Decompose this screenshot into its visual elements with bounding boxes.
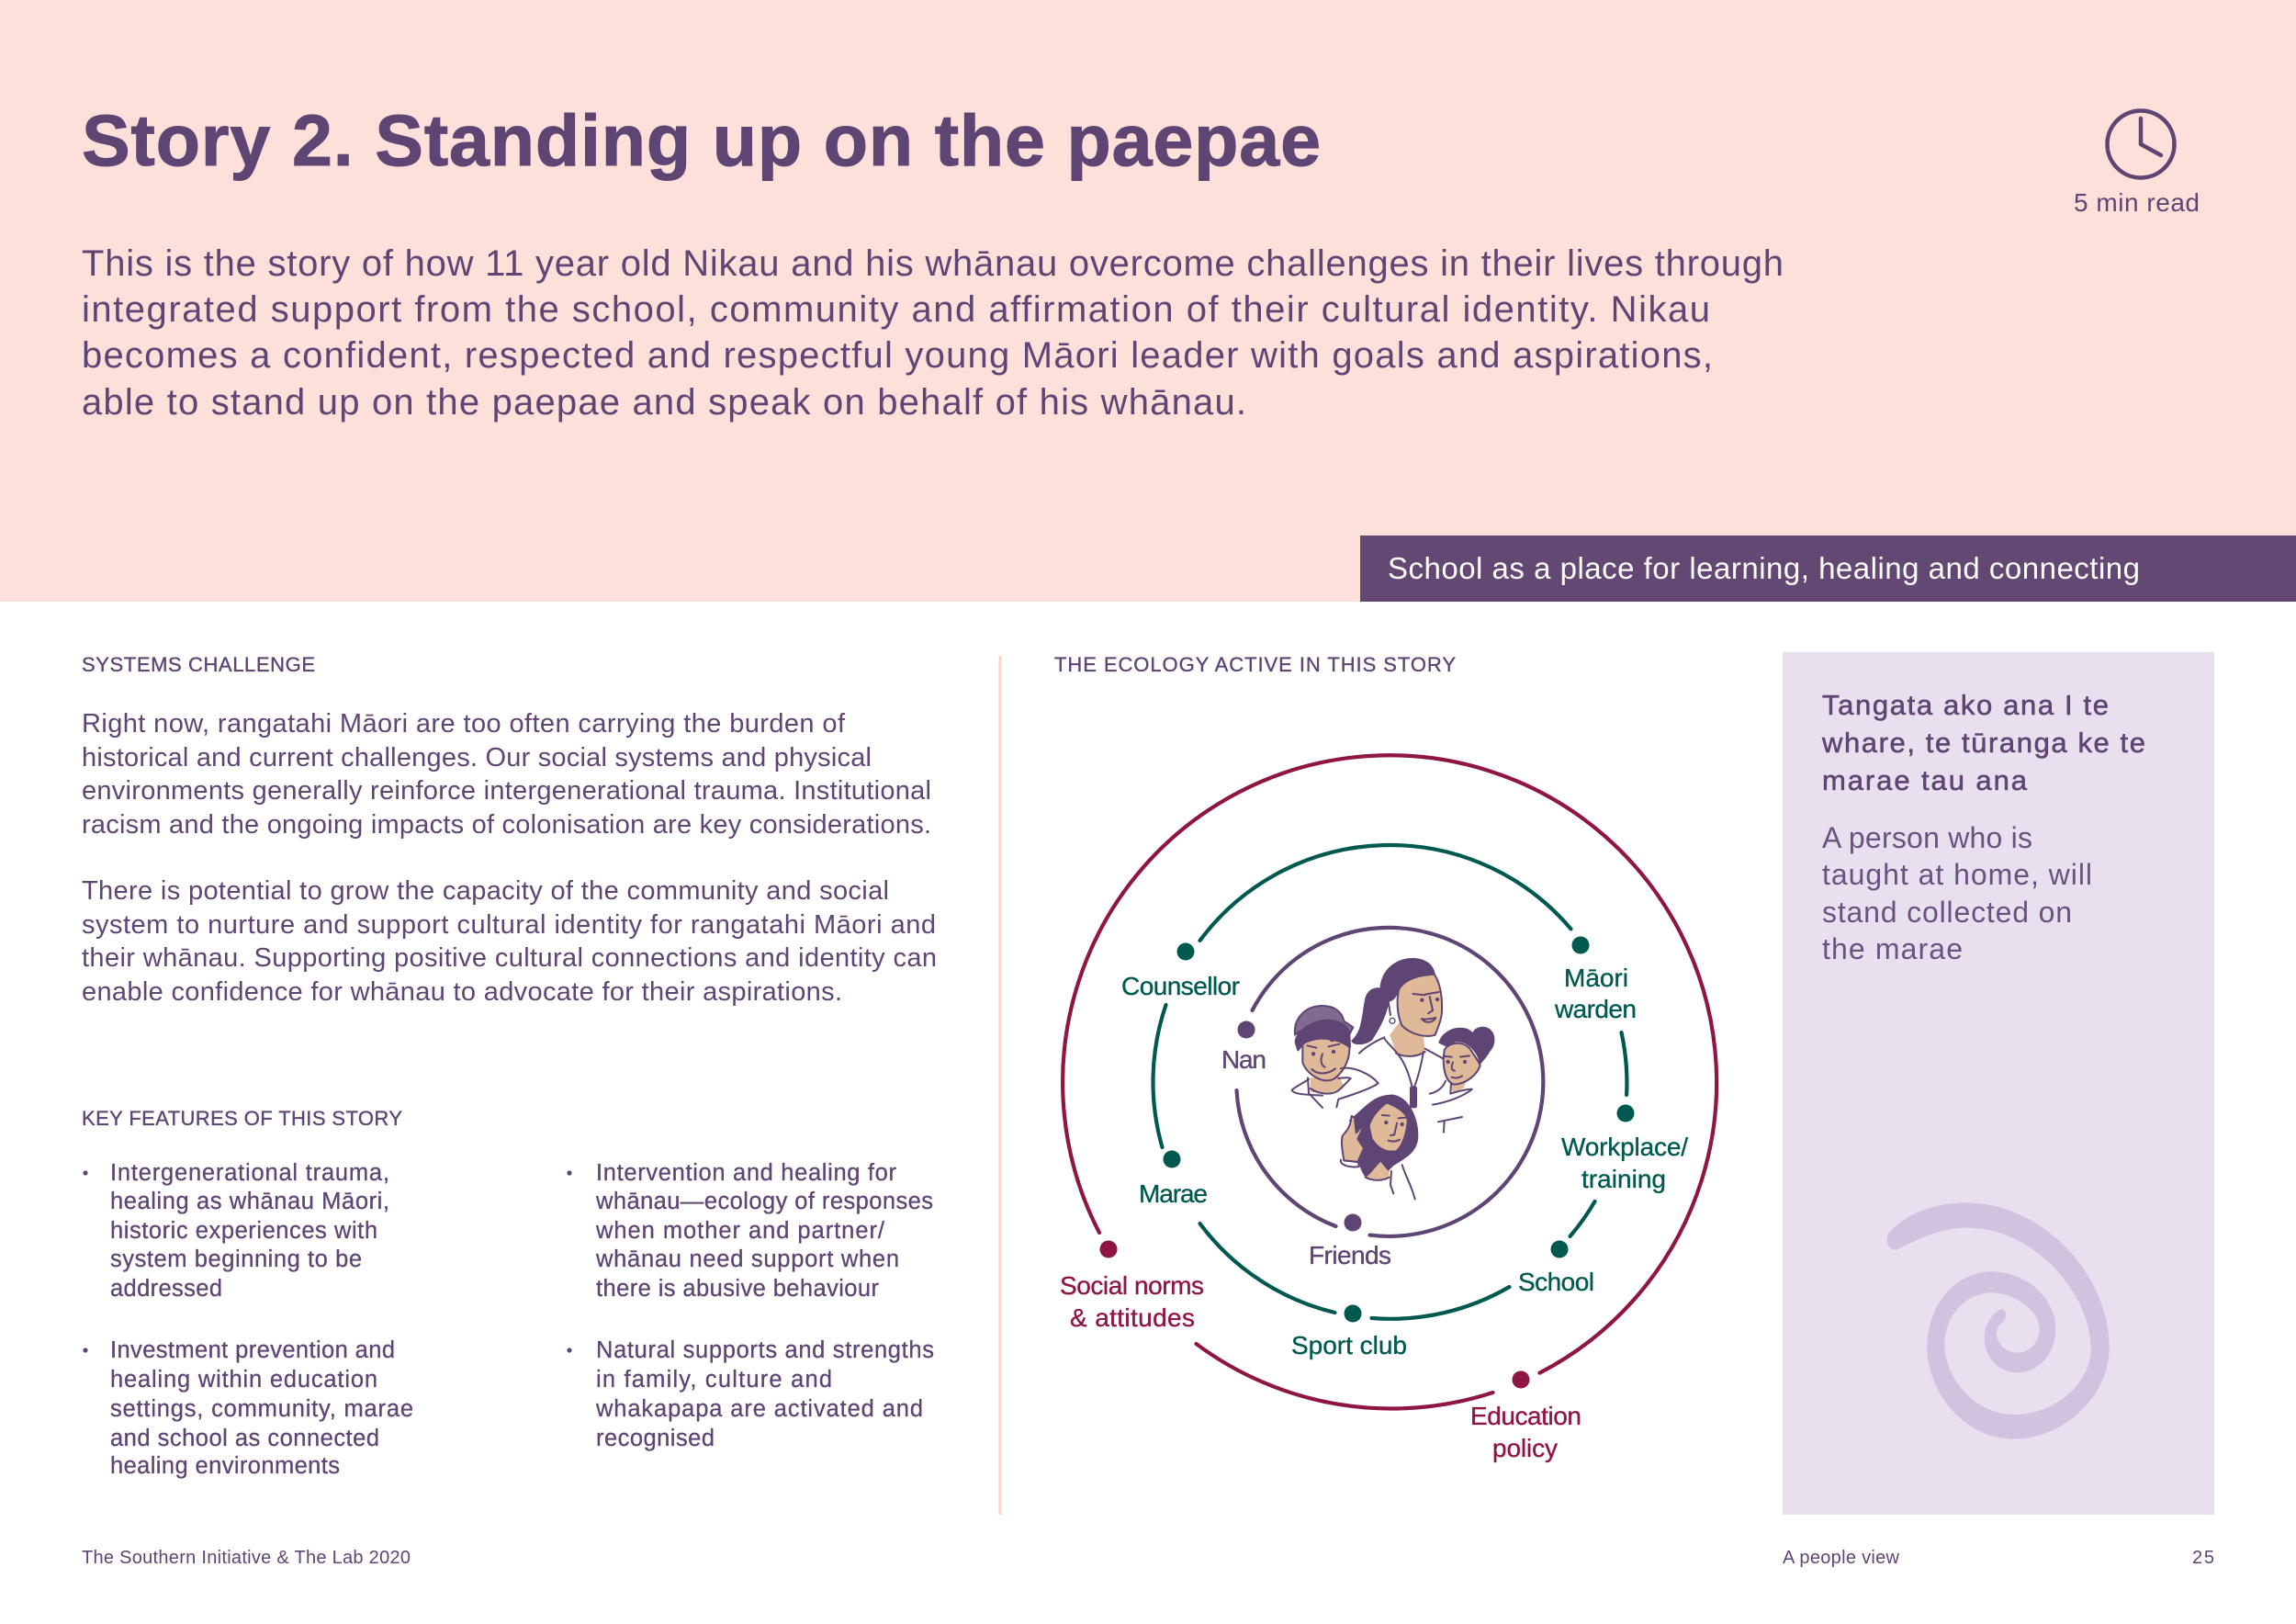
figure: girl making peace sign [1341, 1096, 1417, 1199]
label: Māori warden [1554, 964, 1637, 1023]
quote in te reo Māori [1821, 689, 2145, 796]
figure: girl with bun [1430, 1028, 1493, 1133]
text block: systems challenge paragraphs: Right now, rangatahi Māori are too often carrying the burden of [82, 709, 846, 739]
figure: boy with cap [1292, 1006, 1379, 1108]
bullet list: left column: settings, community, marae [110, 1396, 413, 1422]
bullet list: right column: whakapapa are activated and [595, 1396, 923, 1422]
bullet list: right column: Natural supports and strengths [596, 1337, 934, 1363]
text block: systems challenge paragraphs [82, 709, 937, 1007]
intro text [82, 243, 1784, 423]
middle ring [1153, 845, 1626, 1319]
bullet list: left column: healing as whānau Māori, [110, 1189, 389, 1214]
label: counsellor: Counsellor [1121, 972, 1240, 1000]
bullet list: left column: healing environments [110, 1453, 340, 1479]
label: social norms [1060, 1271, 1204, 1332]
heading: key features: KEY FEATURES OF THIS STORY [82, 1107, 402, 1130]
quote translation: A person who is [1822, 821, 2032, 854]
label: Māori warden: Māori [1564, 964, 1628, 992]
intro text: This is the story of how 11 year old Nikau and his whānau overcome challenges in their lives through [82, 243, 1784, 284]
label: nan: Nan [1221, 1045, 1266, 1074]
text block: systems challenge paragraphs: system to nurture and support cultural identity for rangatahi Māori and [82, 910, 936, 940]
inner ring nodes [1221, 1021, 1391, 1269]
bullet list: right column: there is abusive behaviour [596, 1276, 880, 1302]
label: workplace training: Workplace/ [1561, 1133, 1688, 1161]
heading: ecology: THE ECOLOGY ACTIVE IN THIS STORY [1054, 653, 1456, 676]
inner ring [1236, 928, 1543, 1236]
figure: woman [1352, 959, 1444, 1107]
text block: systems challenge paragraphs: their whānau. Supporting positive cultural connections and identity can [82, 943, 937, 973]
icon: koru spiral [1887, 1202, 2110, 1439]
quote in te reo Māori: Tangata ako ana I te [1822, 689, 2109, 721]
header panel [0, 0, 2296, 602]
label: social norms: Social norms [1060, 1271, 1204, 1300]
bullet list: left column: healing within education [110, 1367, 377, 1393]
label: Māori warden: warden [1554, 995, 1637, 1023]
bullet list: left column: historic experiences with [110, 1218, 377, 1244]
bullet list: left column: Investment prevention and [110, 1337, 395, 1363]
panel: systems challenge [82, 653, 937, 1007]
heading: systems challenge: SYSTEMS CHALLENGE [82, 653, 315, 676]
outer ring nodes [1060, 1240, 1581, 1462]
label: school: School [1518, 1268, 1594, 1296]
label: workplace training: training [1581, 1165, 1666, 1193]
panel: ecology diagram [1054, 653, 1716, 1462]
quote translation: the marae [1822, 932, 1963, 965]
text block: systems challenge paragraphs: enable confidence for whānau to advocate for their aspirations. [82, 977, 842, 1007]
bullet list: left column: system beginning to be [110, 1246, 362, 1272]
intro text: able to stand up on the paepae and speak on behalf of his whānau. [82, 382, 1246, 423]
footer: A people view [1783, 1548, 1900, 1568]
bullet list: left column: Intergenerational trauma, [110, 1160, 389, 1186]
middle ring nodes [1121, 937, 1688, 1359]
label: workplace training [1561, 1133, 1688, 1193]
quote translation: stand collected on [1822, 896, 2072, 929]
footer [82, 1548, 2214, 1568]
outer ring [1063, 755, 1716, 1409]
title: Story 2. Standing up on the paepae [82, 99, 1321, 181]
intro text: integrated support from the school, community and affirmation of their cultural identity. Nikau [82, 289, 1710, 330]
bullet list: right column: whānau need support when [595, 1246, 899, 1272]
bullet list: left column [83, 1160, 413, 1479]
bullet list: left column: addressed [110, 1276, 222, 1302]
quote translation: taught at home, will [1822, 858, 2092, 891]
panel: whakataukī quote [1783, 652, 2214, 1515]
label: sport club: Sport club [1291, 1331, 1407, 1359]
label: social norms: & attitudes [1070, 1303, 1195, 1332]
label: marae: Marae [1139, 1179, 1208, 1208]
bullet list: right column: in family, culture and [596, 1367, 832, 1393]
text block: systems challenge paragraphs: There is potential to grow the capacity of the community and social [82, 876, 889, 906]
label: friends: Friends [1309, 1241, 1391, 1269]
text block: systems challenge paragraphs: racism and the ongoing impacts of colonisation are key considerations. [82, 810, 931, 840]
text block: systems challenge paragraphs: historical and current challenges. Our social systems and physical [82, 743, 872, 773]
label: education policy [1470, 1402, 1581, 1462]
footer: 25 [2192, 1548, 2214, 1568]
bullet list: right column: Intervention and healing for [596, 1160, 896, 1186]
text block: systems challenge paragraphs: environments generally reinforce intergenerational trauma. Institutional [82, 776, 931, 806]
footer: The Southern Initiative & The Lab 2020 [82, 1548, 411, 1568]
label: education policy: policy [1492, 1434, 1558, 1462]
quote in te reo Māori: whare, te tūranga ke te [1821, 727, 2145, 759]
panel: key features [82, 1107, 934, 1479]
bullet list: right column: whānau—ecology of responses [595, 1189, 933, 1214]
theme band: School as a place for learning, healing and connecting [1388, 551, 2140, 585]
illustration: whānau group [1292, 959, 1493, 1199]
label: education policy: Education [1470, 1402, 1581, 1430]
bullet list: right column [567, 1160, 934, 1451]
intro text: becomes a confident, respected and respectful young Māori leader with goals and aspirations, [82, 335, 1713, 376]
bullet list: right column: recognised [596, 1426, 715, 1451]
reading time: 5 min read [2074, 188, 2200, 217]
quote translation [1822, 821, 2092, 965]
icon: clock [2107, 110, 2175, 178]
theme band [1360, 536, 2296, 602]
quote in te reo Māori: marae tau ana [1822, 764, 2028, 796]
bullet list: left column: and school as connected [110, 1426, 379, 1451]
chart: concentric ecology rings [1063, 755, 1716, 1409]
bullet list: right column: when mother and partner/ [595, 1218, 885, 1244]
